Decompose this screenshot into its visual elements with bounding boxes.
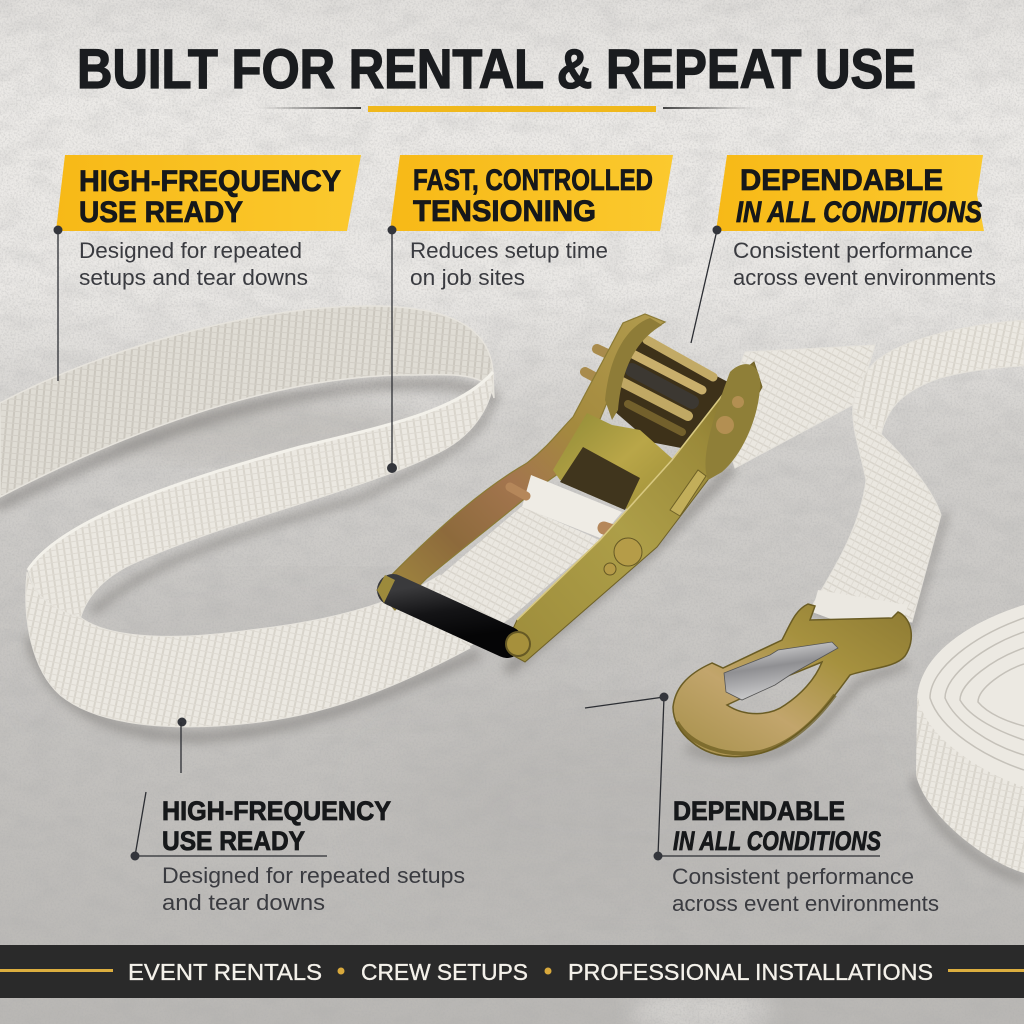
near ratchet wheel xyxy=(705,364,760,480)
heading: USE READY xyxy=(162,826,305,856)
description: Consistent performance xyxy=(733,238,973,263)
strap: front band xyxy=(28,372,493,620)
strap: lower loop xyxy=(26,572,470,727)
webbing strap: right of ratchet xyxy=(720,345,875,468)
yellow banner xyxy=(56,155,361,231)
footer gold rules xyxy=(0,969,1024,972)
footer separators xyxy=(338,968,552,974)
heading: IN ALL CONDITIONS xyxy=(673,826,881,856)
handle grip xyxy=(393,590,507,642)
centre plate with window xyxy=(553,413,676,520)
heading: FAST, CONTROLLED xyxy=(413,164,653,197)
strap: back band xyxy=(0,306,494,497)
yellow banner xyxy=(716,155,984,231)
heading: IN ALL CONDITIONS xyxy=(736,196,982,229)
description: across event environments xyxy=(733,265,996,290)
webbing strap: upper right fold xyxy=(853,320,1024,440)
heading: HIGH-FREQUENCY xyxy=(79,165,341,198)
strap fold into hook xyxy=(812,590,908,643)
leader line xyxy=(387,226,397,473)
hook body xyxy=(673,604,911,757)
footer band xyxy=(0,945,1024,998)
window opening xyxy=(560,447,640,510)
latch xyxy=(724,642,838,700)
leader line xyxy=(691,226,722,343)
coiled strap roll xyxy=(916,605,1024,873)
webbing through buckle xyxy=(433,506,600,650)
webbing strap: down to hook xyxy=(812,410,941,622)
rollers xyxy=(618,340,713,432)
description: and tear downs xyxy=(162,890,325,915)
far ratchet wheel xyxy=(605,318,662,420)
description: Reduces setup time xyxy=(410,238,608,263)
spindle xyxy=(510,487,622,534)
webbing loop over spindle xyxy=(522,475,622,538)
coil rings xyxy=(930,618,1024,770)
arm top edge highlight xyxy=(517,375,738,620)
heading: TENSIONING xyxy=(413,195,596,228)
panel: dependable top xyxy=(691,155,996,343)
description: Consistent performance xyxy=(672,864,914,889)
panel: dependable bottom xyxy=(585,692,939,916)
webbing strap: long looped strap xyxy=(0,306,494,727)
axle bolt xyxy=(614,538,642,566)
description: Designed for repeated xyxy=(79,238,302,263)
heading: DEPENDABLE xyxy=(673,796,845,826)
left handle arm xyxy=(377,314,665,610)
heading: DEPENDABLE xyxy=(740,164,943,197)
strap shadows xyxy=(0,383,1024,880)
panel: fast controlled tensioning xyxy=(387,155,673,473)
leader lines xyxy=(585,692,880,860)
footer labels: EVENT RENTALS xyxy=(128,959,322,985)
small bolt xyxy=(604,563,616,575)
yellow banner xyxy=(390,155,673,231)
heading: HIGH-FREQUENCY xyxy=(162,796,391,826)
title: BUILT FOR RENTAL & REPEAT USE xyxy=(77,37,916,100)
panel: high-frequency bottom xyxy=(130,718,465,915)
strap: top lip highlight xyxy=(28,372,493,570)
description: setups and tear downs xyxy=(79,265,308,290)
hook lower rim xyxy=(677,695,835,753)
roller housing dark interior xyxy=(592,332,728,452)
title divider xyxy=(258,106,755,112)
description: on job sites xyxy=(410,265,525,290)
description: Designed for repeated setups xyxy=(162,863,465,888)
side pawl xyxy=(670,470,706,516)
heading: USE READY xyxy=(79,196,243,229)
leader lines xyxy=(130,718,327,860)
bolts on far wheel xyxy=(585,349,612,380)
leader line xyxy=(54,226,62,381)
coil top xyxy=(918,605,1024,787)
footer labels: CREW SETUPS xyxy=(361,959,528,985)
panel: high-frequency top xyxy=(54,155,361,381)
coil side xyxy=(916,605,1024,873)
grip end cap xyxy=(377,575,395,603)
end bolt xyxy=(506,632,530,656)
right handle arm xyxy=(503,362,762,662)
wheel hub xyxy=(716,396,744,434)
description: across event environments xyxy=(672,891,939,916)
footer labels: PROFESSIONAL INSTALLATIONS xyxy=(568,959,933,985)
ratchet buckle xyxy=(377,314,762,662)
snap hook xyxy=(673,604,911,757)
